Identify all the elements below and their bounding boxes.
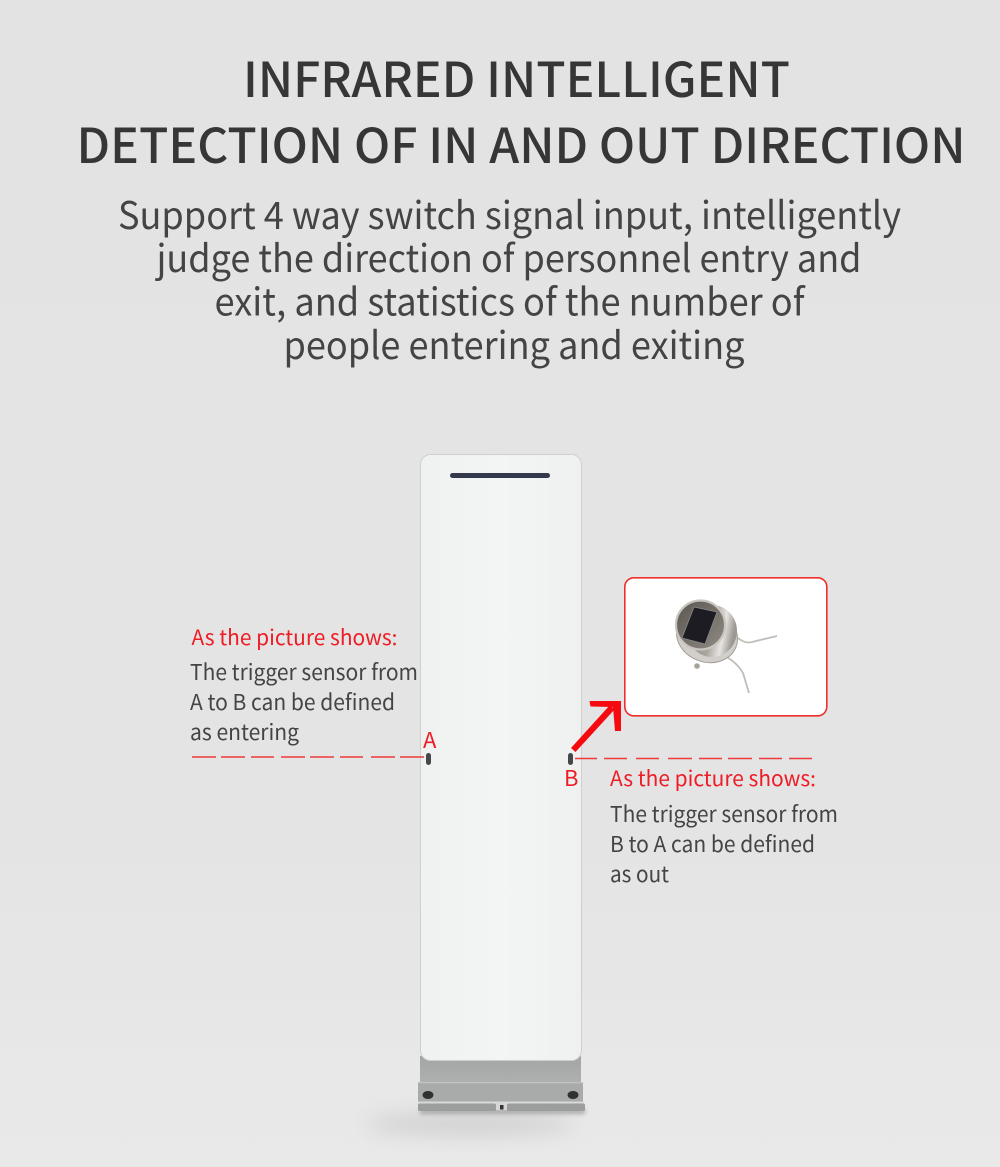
title: DETECTION OF IN AND OUT DIRECTION: [76, 107, 966, 177]
subtitle text block: Support 4 way switch signal input, intelligently: [118, 185, 901, 240]
callout: sensor photo: [625, 578, 827, 716]
icon: infrared sensor component: [669, 600, 777, 693]
left annotation text: [190, 622, 418, 747]
right annotation text: As the picture shows:: [610, 763, 816, 793]
label B: B: [564, 761, 578, 793]
device: sensor gate stand: [418, 454, 585, 1111]
left annotation text: The trigger sensor from: [190, 655, 418, 687]
callout frame: [625, 578, 827, 716]
dashed line B: [575, 758, 812, 760]
device white panel: [420, 454, 582, 1060]
red arrow: [571, 701, 621, 752]
sensor A: [426, 753, 431, 765]
floor shadow: [365, 1109, 585, 1135]
subtitle text block: exit, and statistics of the number of: [214, 272, 806, 326]
left annotation text: As the picture shows:: [192, 622, 398, 652]
right annotation text: [610, 763, 838, 889]
subtitle text block: judge the direction of personnel entry and: [155, 228, 862, 283]
left annotation text: as entering: [190, 715, 300, 747]
right annotation text: B to A can be defined: [610, 827, 815, 859]
right annotation text: as out: [610, 857, 669, 889]
sensor B: [568, 753, 573, 765]
title: [76, 41, 966, 177]
title: INFRARED INTELLIGENT: [243, 41, 790, 111]
right annotation text: The trigger sensor from: [610, 797, 838, 829]
label A: A: [423, 723, 437, 755]
subtitle text block: people entering and exiting: [284, 315, 744, 370]
dashed line A: [192, 756, 424, 758]
subtitle text block: [118, 185, 901, 370]
device base: [418, 1056, 585, 1111]
top slot: [450, 473, 550, 478]
left annotation text: A to B can be defined: [190, 685, 395, 717]
